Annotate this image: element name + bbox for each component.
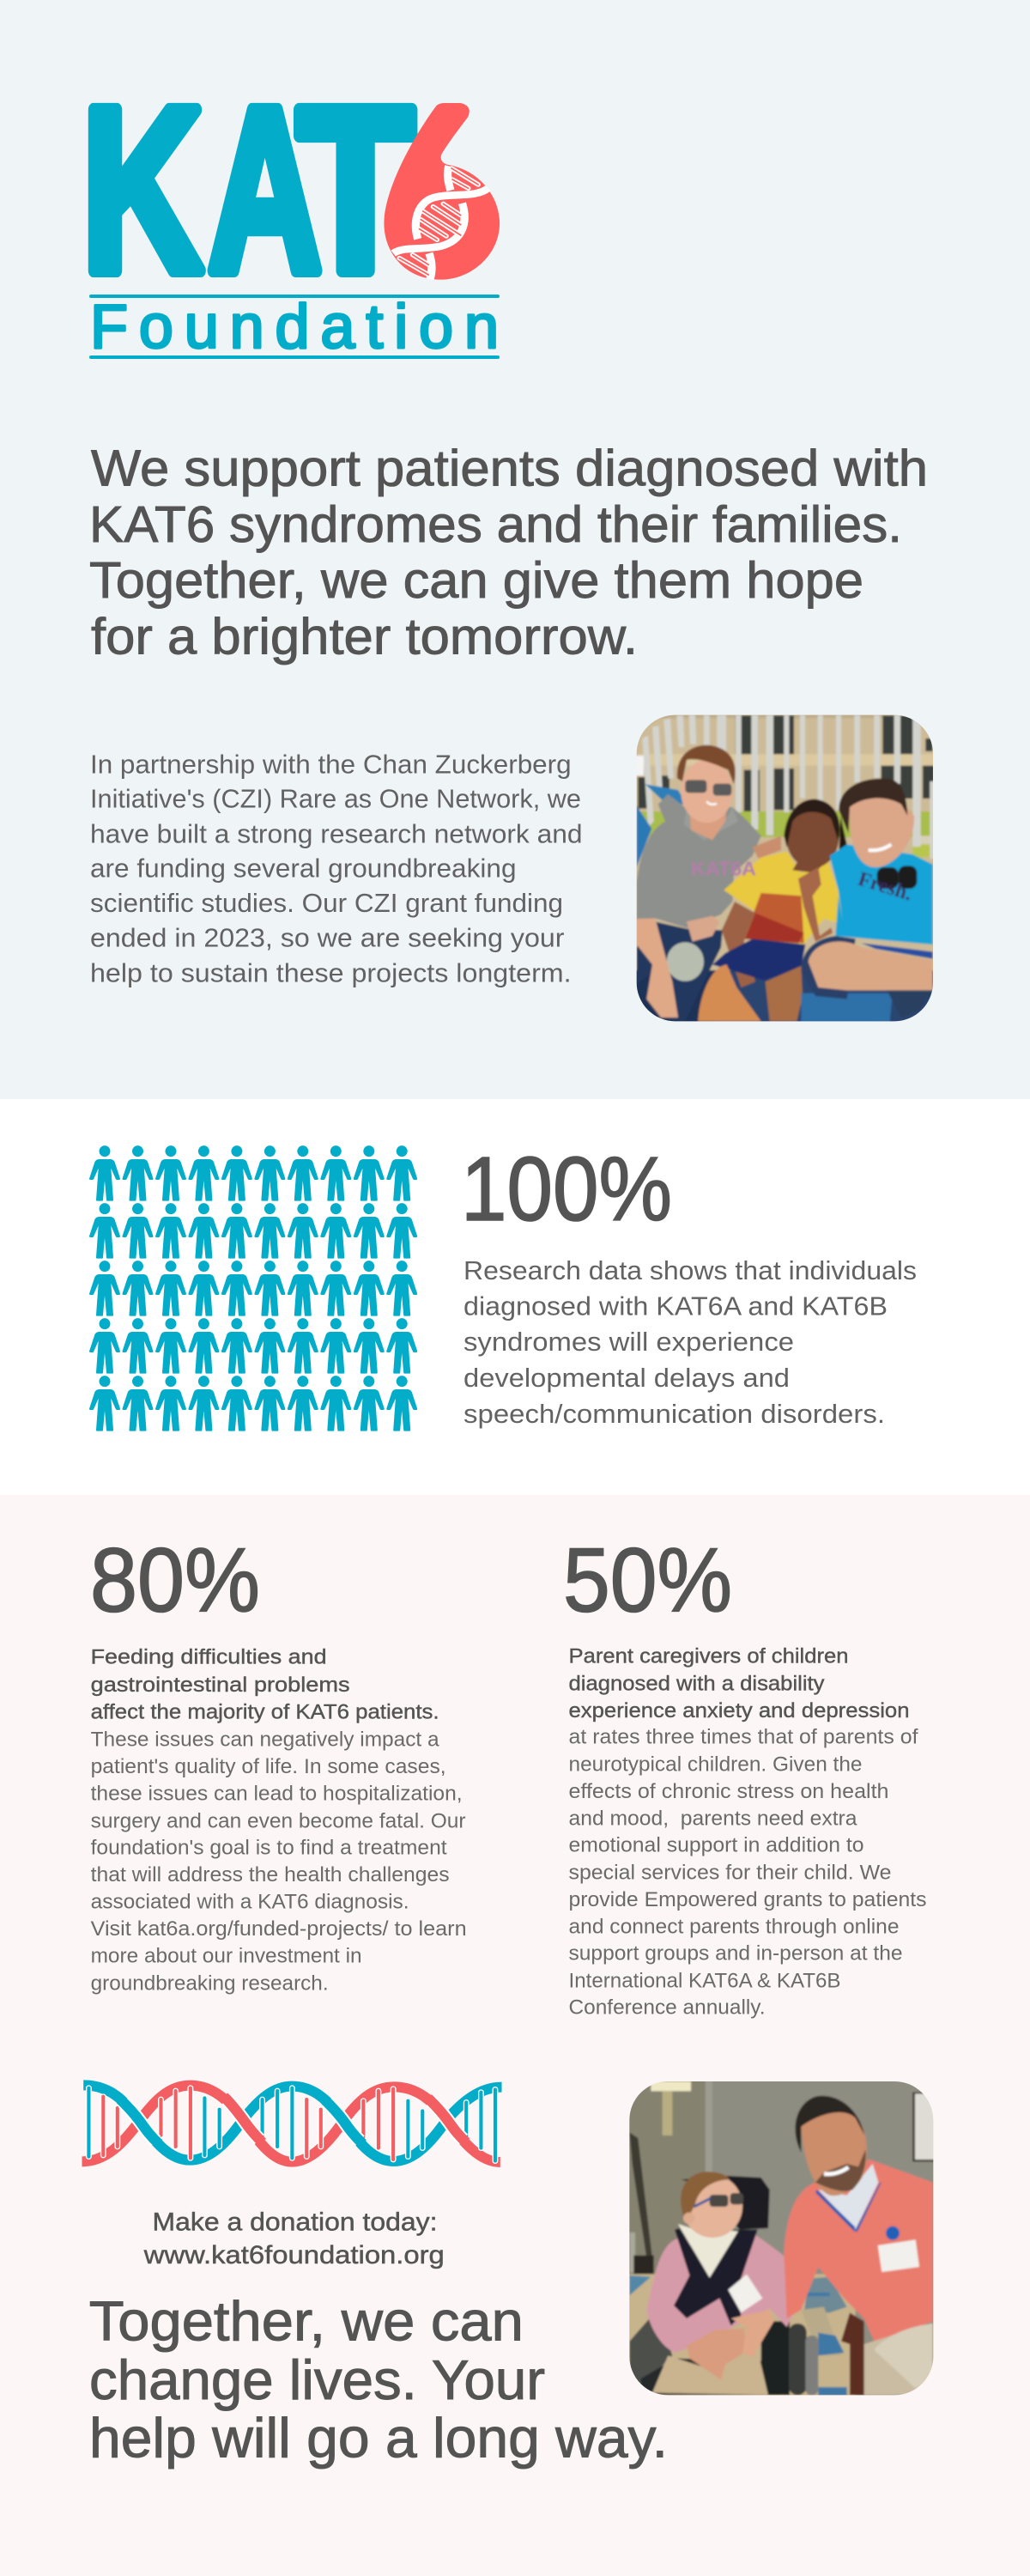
text block: parent caregivers — [568, 1645, 927, 2020]
closing statement: change lives. Your — [89, 2348, 545, 2411]
text block: parent caregivers: and connect parents through online — [568, 1916, 900, 1939]
text block: research data — [464, 1256, 917, 1429]
logo: KAT6 Foundation — [82, 59, 500, 361]
heading: mission statement: for a brighter tomorrow. — [91, 609, 638, 665]
closing statement: Together, we can — [89, 2290, 524, 2353]
text block: parent caregivers: at rates three times that of parents of — [568, 1726, 918, 1749]
text block: donation call to action: Make a donation today: — [153, 2208, 438, 2237]
text block: parent caregivers: International KAT6A & KAT6B — [568, 1969, 841, 1992]
logo wordmark: KAT: T — [297, 59, 414, 320]
stat: 100%: 100% — [461, 1139, 672, 1240]
text block: parent caregivers: provide Empowered grants to patients — [568, 1888, 927, 1911]
text block: feeding difficulties: these issues can lead to hospitalization, — [91, 1783, 463, 1806]
logo wordmark: KAT: K — [82, 60, 203, 321]
heading: mission statement: We support patients diagnosed with — [91, 440, 928, 497]
text block: feeding difficulties: surgery and can even become fatal. Our — [91, 1809, 466, 1832]
photo: caregiver and two children: Fresh. — [856, 868, 915, 906]
photo: caregiver and two children — [629, 707, 944, 1028]
text block: parent caregivers: emotional support in addition to — [568, 1834, 863, 1857]
text block: CZI partnership: are funding several groundbreaking — [90, 854, 517, 884]
logo numeral: 6 drop with DNA — [384, 103, 500, 298]
text block: feeding difficulties: foundation's goal is to find a treatment — [91, 1836, 447, 1860]
text block: CZI partnership: help to sustain these projects longterm. — [90, 958, 572, 987]
text block: CZI partnership: Initiative's (CZI) Rare as One Network, we — [90, 785, 581, 814]
closing statement — [89, 2290, 668, 2470]
heading: mission statement — [89, 440, 928, 665]
text block: donation call to action: www.kat6foundation.org — [143, 2241, 445, 2269]
text block: feeding difficulties: associated with a KAT6 diagnosis. — [91, 1891, 409, 1914]
text block: research data: Research data shows that individuals — [464, 1256, 917, 1285]
panel: intro — [0, 0, 1030, 1099]
panel: 100 percent — [0, 1099, 1030, 1495]
text block: research data: speech/communication disorders. — [464, 1400, 885, 1429]
text block: parent caregivers: special services for their child. We — [568, 1861, 891, 1884]
text block: parent caregivers: and mood, parents need extra — [568, 1807, 857, 1831]
text block: CZI partnership — [90, 750, 583, 987]
photo: caregiver and two children: KAT6A — [691, 857, 756, 879]
stat: 80%: 80% — [90, 1530, 260, 1631]
heading: mission statement: Together, we can give them hope — [89, 552, 863, 609]
photo: boy in wheelchair with man — [627, 2078, 938, 2400]
text block: feeding difficulties: affect the majority of KAT6 patients. — [91, 1701, 439, 1724]
text block: research data: syndromes will experience — [464, 1327, 794, 1357]
closing statement: help will go a long way. — [89, 2407, 668, 2470]
text block: CZI partnership: ended in 2023, so we are seeking your — [90, 924, 565, 953]
text block: research data: developmental delays and — [464, 1364, 790, 1393]
text block: feeding difficulties: Feeding difficulties and — [91, 1645, 327, 1669]
text block: feeding difficulties: Visit kat6a.org/funded-projects/ to learn — [91, 1917, 467, 1941]
text block: parent caregivers: diagnosed with a disability — [568, 1672, 824, 1695]
text block: CZI partnership: scientific studies. Our CZI grant funding — [90, 889, 563, 918]
text block: parent caregivers: Parent caregivers of children — [568, 1645, 848, 1668]
text block: CZI partnership: In partnership with the Chan Zuckerberg — [90, 750, 572, 780]
text block: parent caregivers: effects of chronic stress on health — [568, 1780, 889, 1803]
logo wordmark: KAT: A — [208, 60, 322, 321]
pictogram: 50 person icons — [89, 1145, 417, 1431]
text block: feeding difficulties — [91, 1645, 467, 1995]
text block: parent caregivers: neurotypical children. Given the — [568, 1753, 862, 1776]
text block: parent caregivers: experience anxiety and depression — [568, 1699, 910, 1722]
text block: feeding difficulties: gastrointestinal problems — [91, 1674, 350, 1697]
text block: feeding difficulties: patient's quality of life. In some cases, — [91, 1755, 446, 1778]
text block: parent caregivers: support groups and in-person at the — [568, 1942, 903, 1965]
logo numeral: 6 drop with DNA: 6 — [407, 163, 479, 298]
logo word: Foundation: Foundation — [90, 293, 499, 361]
text block: feeding difficulties: These issues can negatively impact a — [91, 1728, 439, 1751]
text block: research data: diagnosed with KAT6A and KAT6B — [464, 1292, 888, 1321]
text block: parent caregivers: Conference annually. — [568, 1996, 766, 2020]
heading: mission statement: KAT6 syndromes and their families. — [89, 496, 902, 553]
icon: DNA double helix — [82, 2085, 502, 2162]
logo wordmark: KAT — [82, 59, 414, 321]
text block: donation call to action — [143, 2208, 445, 2269]
text block: CZI partnership: have built a strong research network and — [90, 819, 583, 848]
panel: statistics and call to action — [0, 1495, 1030, 2576]
text block: feeding difficulties: more about our investment in — [91, 1945, 362, 1968]
text block: feeding difficulties: groundbreaking research. — [91, 1971, 329, 1995]
text block: feeding difficulties: that will address the health challenges — [91, 1863, 450, 1886]
stat: 50%: 50% — [563, 1530, 732, 1631]
